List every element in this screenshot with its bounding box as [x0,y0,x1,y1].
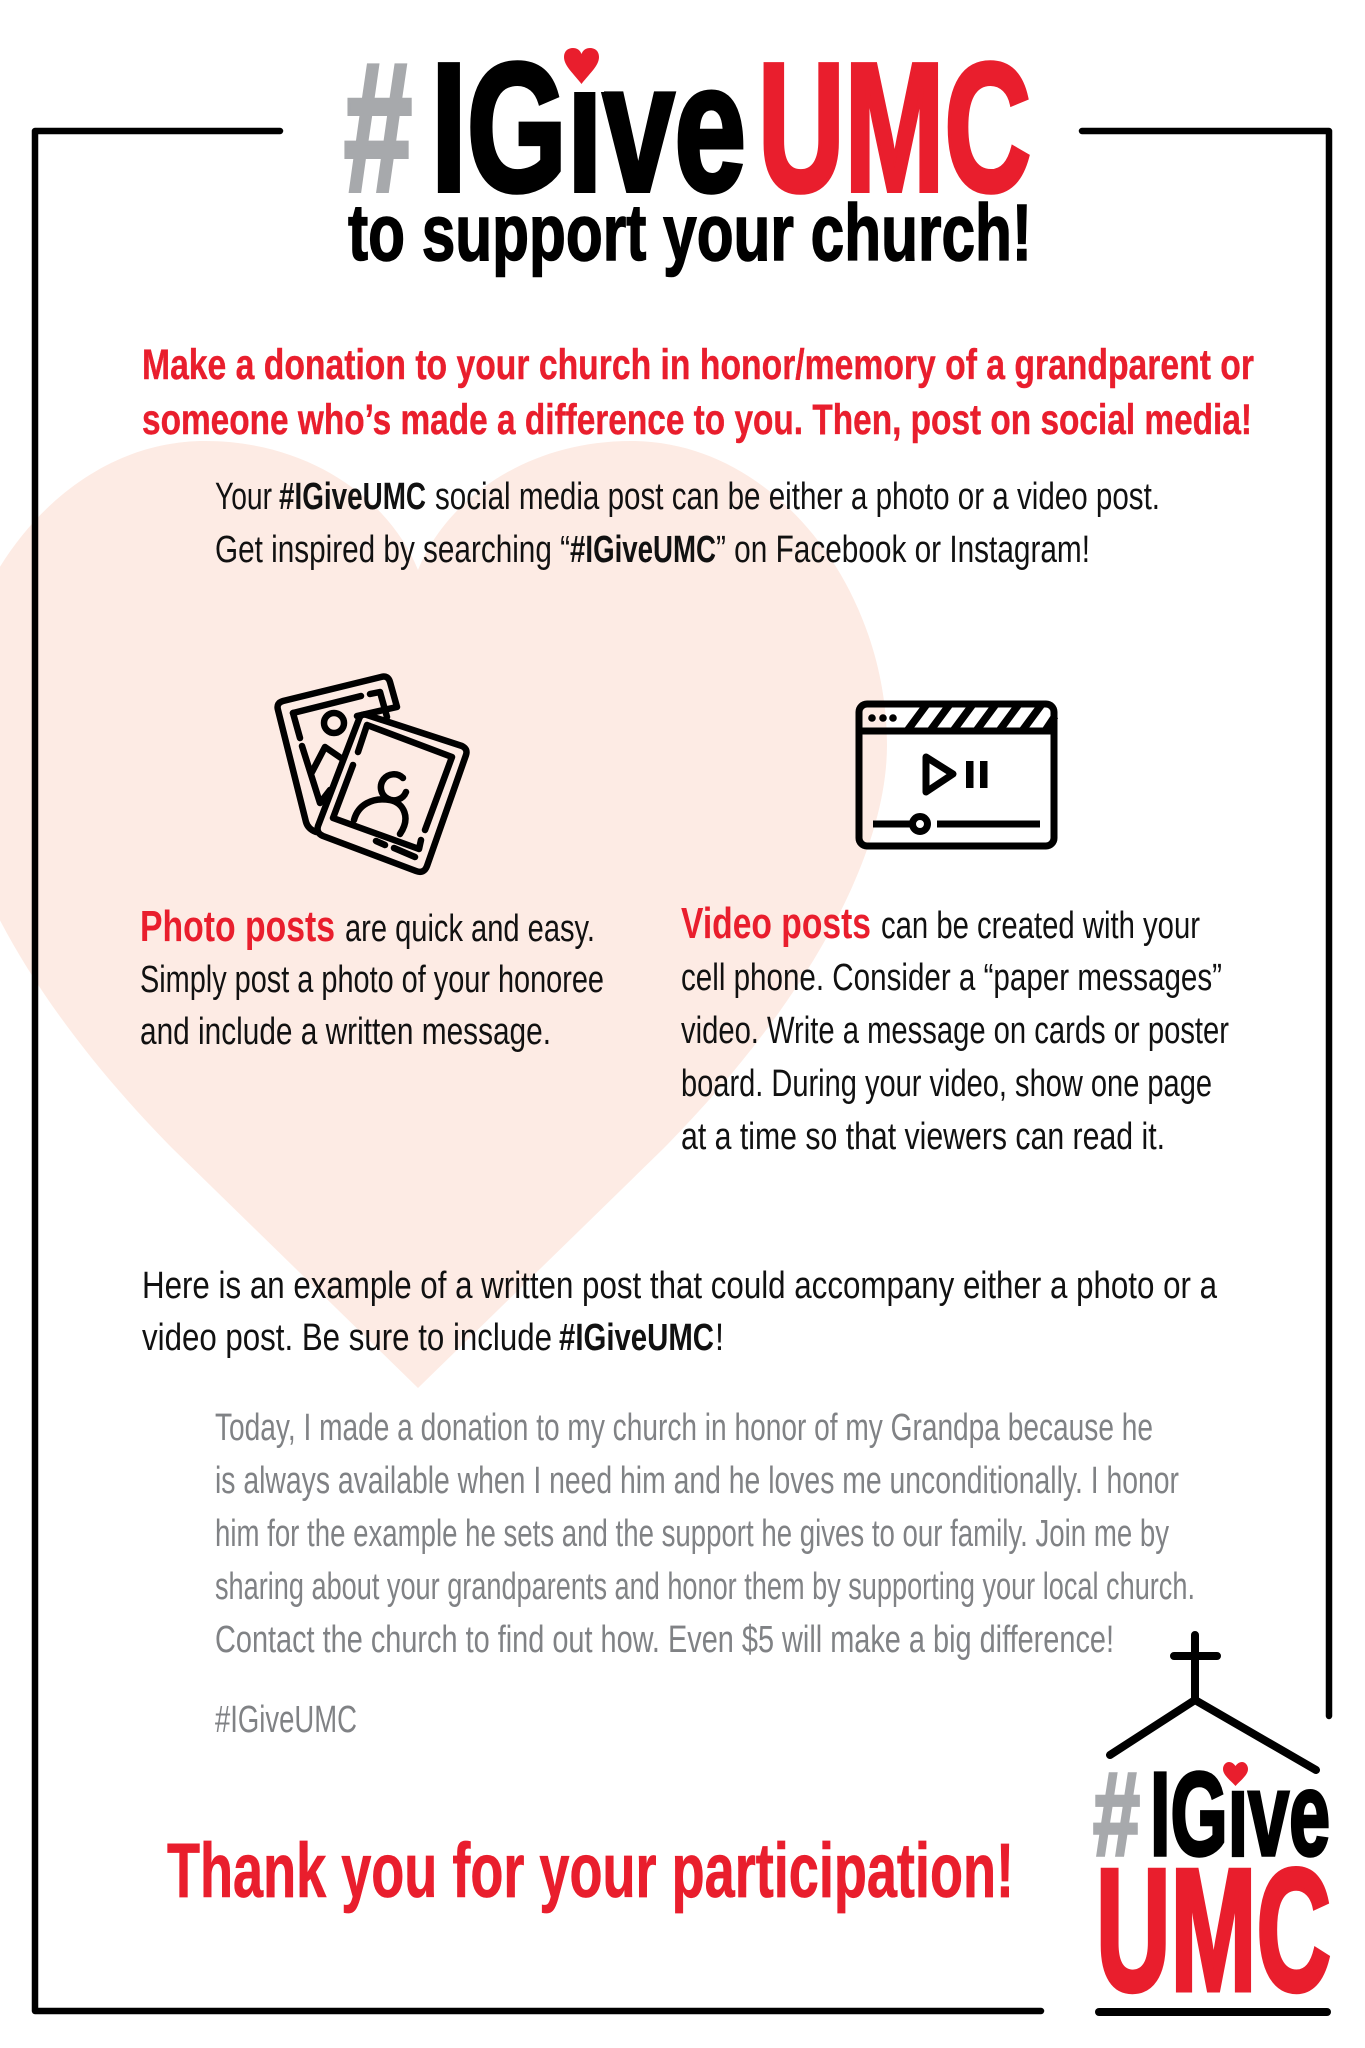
video posts text: cell phone. Consider a “paper messages” [681,957,1222,999]
intro text: #IGiveUMC [279,476,426,518]
church cross and roof [1110,1635,1316,1770]
example post text [215,1407,1195,1741]
intro text: #IGiveUMC [570,529,716,571]
intro text: Your [215,476,272,518]
logo wordmark: # [1093,1748,1140,1881]
photo posts text: Photo posts [140,902,335,951]
intro text: ” on Facebook or Instagram! [716,529,1090,571]
example intro text: video post. Be sure to include [142,1317,552,1359]
intro text [215,476,1160,571]
icon: video [859,704,1055,846]
icon: photos [278,677,466,872]
intro text: Get inspired by searching “ [215,529,570,571]
subtitle: to support your church! [348,188,1032,277]
logo: church IGive UMC [1093,1635,1331,2027]
example post text: Contact the church to find out how. Even $5 will make a big difference! [215,1619,1114,1661]
thank you message: Thank you for your participation! [167,1828,1014,1914]
intro text: social media post can be either a photo or a video post. [435,476,1160,518]
logo wordmark [1093,1748,1331,2027]
background heart [0,441,887,1388]
example intro text: #IGiveUMC [559,1317,714,1359]
photo posts text: Simply post a photo of your honoree [140,959,604,1001]
video posts text: Video posts [681,899,871,948]
title: #IGiveUMC: # [344,24,412,230]
red call to action [142,341,1254,444]
example intro text [142,1265,1218,1359]
photo posts text [140,902,604,1053]
video posts text [681,899,1229,1158]
video posts text: can be created with your [881,905,1200,947]
video posts text: board. During your video, show one page [681,1063,1212,1105]
example post text: #IGiveUMC [215,1699,357,1741]
photo posts text: and include a written message. [140,1011,551,1053]
video posts text: at a time so that viewers can read it. [681,1116,1165,1158]
photo posts text: are quick and easy. [345,908,595,950]
logo underline [1099,2008,1327,2016]
title: #IGiveUMC: UMC [758,24,1031,230]
title: #IGiveUMC: IGive [431,24,746,230]
title: #IGiveUMC [344,24,1031,230]
example intro text: ! [715,1317,724,1359]
